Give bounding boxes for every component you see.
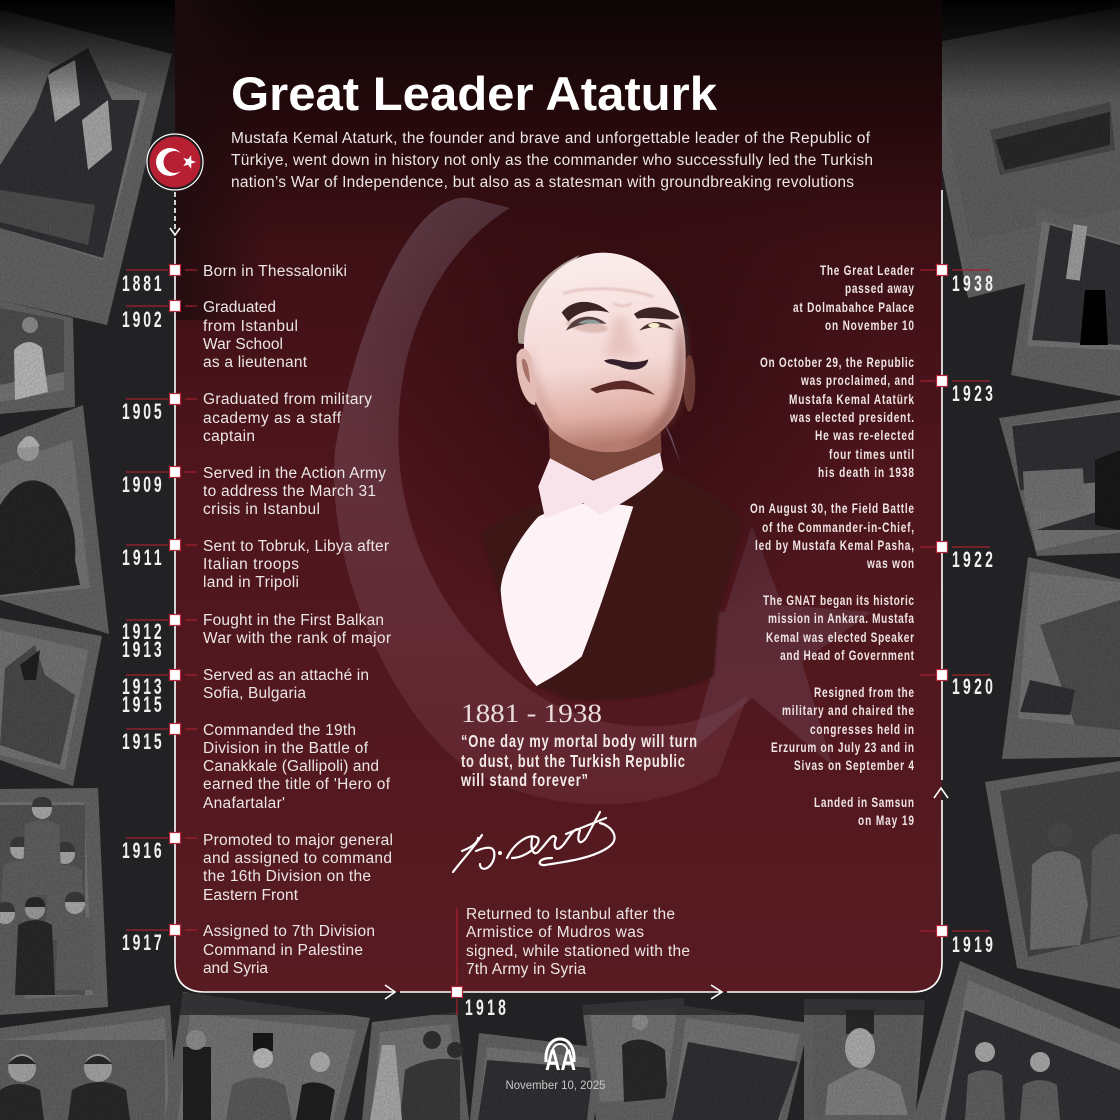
1913-1915: Sofia, Bulgaria xyxy=(203,685,306,702)
shirt bib xyxy=(501,503,633,686)
1919 text: on May 19 xyxy=(858,812,914,828)
nose bridge shade xyxy=(603,317,640,360)
flag star xyxy=(690,526,872,765)
1909: Served in the Action Army xyxy=(203,465,386,482)
1912-1913: War with the rank of major xyxy=(203,630,391,647)
1911: Sent to Tobruk, Libya after xyxy=(203,538,389,555)
intro paragraph: nation’s War of Independence, but also as a statesman with groundbreaking revolutions xyxy=(231,174,854,191)
right ear xyxy=(683,355,695,412)
1919 text: Landed in Samsun xyxy=(814,794,914,810)
1920: Kemal was elected Speaker xyxy=(766,629,914,645)
1909: crisis in Istanbul xyxy=(203,501,320,518)
1923 xyxy=(760,354,993,480)
date: November 10, 2025 xyxy=(506,1080,606,1092)
intro paragraph: Mustafa Kemal Ataturk, the founder and brave and unforgettable leader of the Republic of xyxy=(231,130,871,147)
1923: On October 29, the Republic xyxy=(760,354,914,370)
1923: 1923 xyxy=(952,381,993,406)
1905: Graduated from military xyxy=(203,391,372,408)
1919 text: Resigned from the xyxy=(814,684,914,700)
1902: Graduated xyxy=(203,299,276,316)
quote: will stand forever” xyxy=(460,771,588,791)
left cheek shade xyxy=(530,340,563,430)
jacket xyxy=(480,470,742,700)
light streak xyxy=(662,417,681,464)
photo: crowd seated xyxy=(470,1033,603,1120)
1919 text: military and chaired the xyxy=(782,702,914,718)
1938: on November 10 xyxy=(825,317,914,333)
1917: Assigned to 7th Division xyxy=(203,923,375,940)
face shade xyxy=(627,317,686,450)
icon: AA logo: AA xyxy=(545,1044,576,1077)
photo: soldiers group right xyxy=(913,961,1120,1120)
bottom timeline entry 1918: signed, while stationed with the xyxy=(466,943,690,960)
1909: 1909 xyxy=(122,472,162,497)
1919 text: congresses held in xyxy=(810,721,914,737)
1881 xyxy=(122,263,347,296)
bottom dark strip xyxy=(175,993,942,1015)
photo: steps with crowd xyxy=(1002,557,1120,759)
intro paragraph: Türkiye, went down in history not only as the commander who successfully led the Turkish xyxy=(231,152,873,169)
1938: 1938 xyxy=(952,271,993,296)
photo: leaders in fur hats xyxy=(165,992,370,1120)
quote: to dust, but the Turkish Republic xyxy=(461,752,685,772)
1916: and assigned to command xyxy=(203,850,392,867)
mouth xyxy=(590,381,655,395)
1938: at Dolmabahce Palace xyxy=(793,299,914,315)
1922: On August 30, the Field Battle xyxy=(750,500,914,516)
photo: Anitkabir xyxy=(917,7,1120,298)
1902: from Istanbul xyxy=(203,318,298,335)
panel: main red background xyxy=(175,0,942,992)
hair xyxy=(518,255,580,347)
1938: The Great Leader xyxy=(820,262,914,278)
top shade xyxy=(0,0,1120,100)
1913-1915 xyxy=(122,667,369,717)
icon: AA logo xyxy=(545,1039,576,1077)
photo: portrait in kalpak xyxy=(804,999,925,1120)
1912-1913: 1912 xyxy=(122,619,162,644)
1913-1915: 1915 xyxy=(122,692,162,717)
1922: 1922 xyxy=(952,547,993,572)
1913-1915: 1913 xyxy=(122,674,162,699)
quote xyxy=(460,732,697,791)
1920 xyxy=(763,592,993,699)
bottom timeline entry 1918 xyxy=(452,906,690,1020)
1881: 1881 xyxy=(122,271,162,296)
timeline line xyxy=(170,190,948,999)
1913-1915: Served as an attaché in xyxy=(203,667,369,684)
1938: passed away xyxy=(845,280,914,296)
eye sockets xyxy=(565,319,608,333)
1905: academy as a staff xyxy=(203,410,342,427)
right hair xyxy=(667,280,690,357)
life dates: 1881 - 1938 xyxy=(461,699,602,728)
bottom timeline entry 1918: Armistice of Mudros was xyxy=(466,924,644,941)
1915: Anafartalar' xyxy=(203,795,285,812)
eyes xyxy=(566,317,607,331)
1911: 1911 xyxy=(122,545,162,570)
1917: and Syria xyxy=(203,960,268,977)
1923: was proclaimed, and xyxy=(800,372,914,388)
icon: Turkish flag xyxy=(147,134,203,190)
1915 xyxy=(122,722,391,812)
1916: Promoted to major general xyxy=(203,832,393,849)
1911 xyxy=(122,538,389,591)
1912-1913: Fought in the First Balkan xyxy=(203,612,384,629)
1902: 1902 xyxy=(122,307,162,332)
photo: officers on steps xyxy=(0,300,75,414)
intro paragraph xyxy=(231,130,873,191)
1915: Division in the Battle of xyxy=(203,740,369,757)
1923: his death in 1938 xyxy=(818,464,914,480)
photo: walking officers xyxy=(985,761,1120,989)
1922: was won xyxy=(866,555,914,571)
1905: captain xyxy=(203,428,255,445)
collar xyxy=(538,453,663,518)
1915: earned the title of 'Hero of xyxy=(203,776,391,793)
1919: 1919 xyxy=(952,932,993,957)
forehead creases xyxy=(563,289,653,306)
photo: officer in pith helmet xyxy=(0,405,109,634)
photo: group of soldiers xyxy=(0,788,108,1015)
photo: wooden house xyxy=(0,10,172,325)
1912-1913: 1913 xyxy=(122,637,162,662)
1923: Mustafa Kemal Atatürk xyxy=(789,391,914,407)
1920: The GNAT began its historic xyxy=(763,592,914,608)
bottom timeline entry 1918: 7th Army in Syria xyxy=(466,961,586,978)
photo: men in black coats xyxy=(662,1005,809,1120)
1912-1913 xyxy=(122,612,391,662)
1917 xyxy=(122,923,375,977)
photo: delegation xyxy=(362,1012,469,1120)
1917: Command in Palestine xyxy=(203,942,363,959)
1902 xyxy=(122,299,308,371)
1919 text xyxy=(771,684,914,828)
1905: 1905 xyxy=(122,399,162,424)
right timeline entries xyxy=(750,262,993,957)
neck xyxy=(548,417,662,481)
quote: “One day my mortal body will turn xyxy=(461,732,697,752)
1902: as a lieutenant xyxy=(203,354,308,371)
nose xyxy=(604,359,648,370)
1915: Commanded the 19th xyxy=(203,722,356,739)
1916: Eastern Front xyxy=(203,887,299,904)
1922: led by Mustafa Kemal Pasha, xyxy=(755,537,914,553)
1909 xyxy=(122,465,386,518)
photo: crowd with flag xyxy=(999,400,1120,556)
1916 xyxy=(122,832,393,904)
bottom timeline entry 1918: 1918 xyxy=(465,995,506,1020)
1916: the 16th Division on the xyxy=(203,868,371,885)
1915: 1915 xyxy=(122,729,162,754)
1911: land in Tripoli xyxy=(203,574,299,591)
1938 xyxy=(793,262,993,333)
face xyxy=(524,253,686,452)
photo: soldier aiming xyxy=(0,618,102,786)
bottom timeline entry 1918: Returned to Istanbul after the xyxy=(466,906,675,923)
1923: He was re-elected xyxy=(815,427,914,443)
1902: War School xyxy=(203,336,283,353)
ear inner xyxy=(522,359,530,383)
1922: of the Commander-in-Chief, xyxy=(762,519,914,535)
1923: was elected president. xyxy=(789,409,914,425)
1919 text: Sivas on September 4 xyxy=(794,757,914,773)
photo: officer standing xyxy=(582,998,684,1120)
1920: 1920 xyxy=(952,674,993,699)
1920: mission in Ankara. Mustafa xyxy=(768,610,914,626)
icon: signature xyxy=(453,812,615,872)
photo: two men in kalpak xyxy=(0,1005,177,1120)
1920: and Head of Government xyxy=(780,647,914,663)
1919 text: Erzurum on July 23 and in xyxy=(771,739,914,755)
photo: guard at column xyxy=(1011,207,1120,396)
brows xyxy=(562,302,609,322)
1923: four times until xyxy=(829,446,914,462)
1919 xyxy=(920,926,993,957)
1881: Born in Thessaloniki xyxy=(203,263,347,280)
title: Great Leader Ataturk xyxy=(231,67,718,120)
1911: Italian troops xyxy=(203,556,299,573)
1909: to address the March 31 xyxy=(203,483,376,500)
1915: Canakkale (Gallipoli) and xyxy=(203,758,379,775)
left timeline entries xyxy=(122,263,393,977)
flag crescent xyxy=(334,198,748,804)
1922 xyxy=(750,500,993,572)
1917: 1917 xyxy=(122,930,162,955)
1916: 1916 xyxy=(122,838,162,863)
left ear xyxy=(516,349,536,405)
1905 xyxy=(122,391,372,445)
portrait of Ataturk xyxy=(480,253,742,700)
